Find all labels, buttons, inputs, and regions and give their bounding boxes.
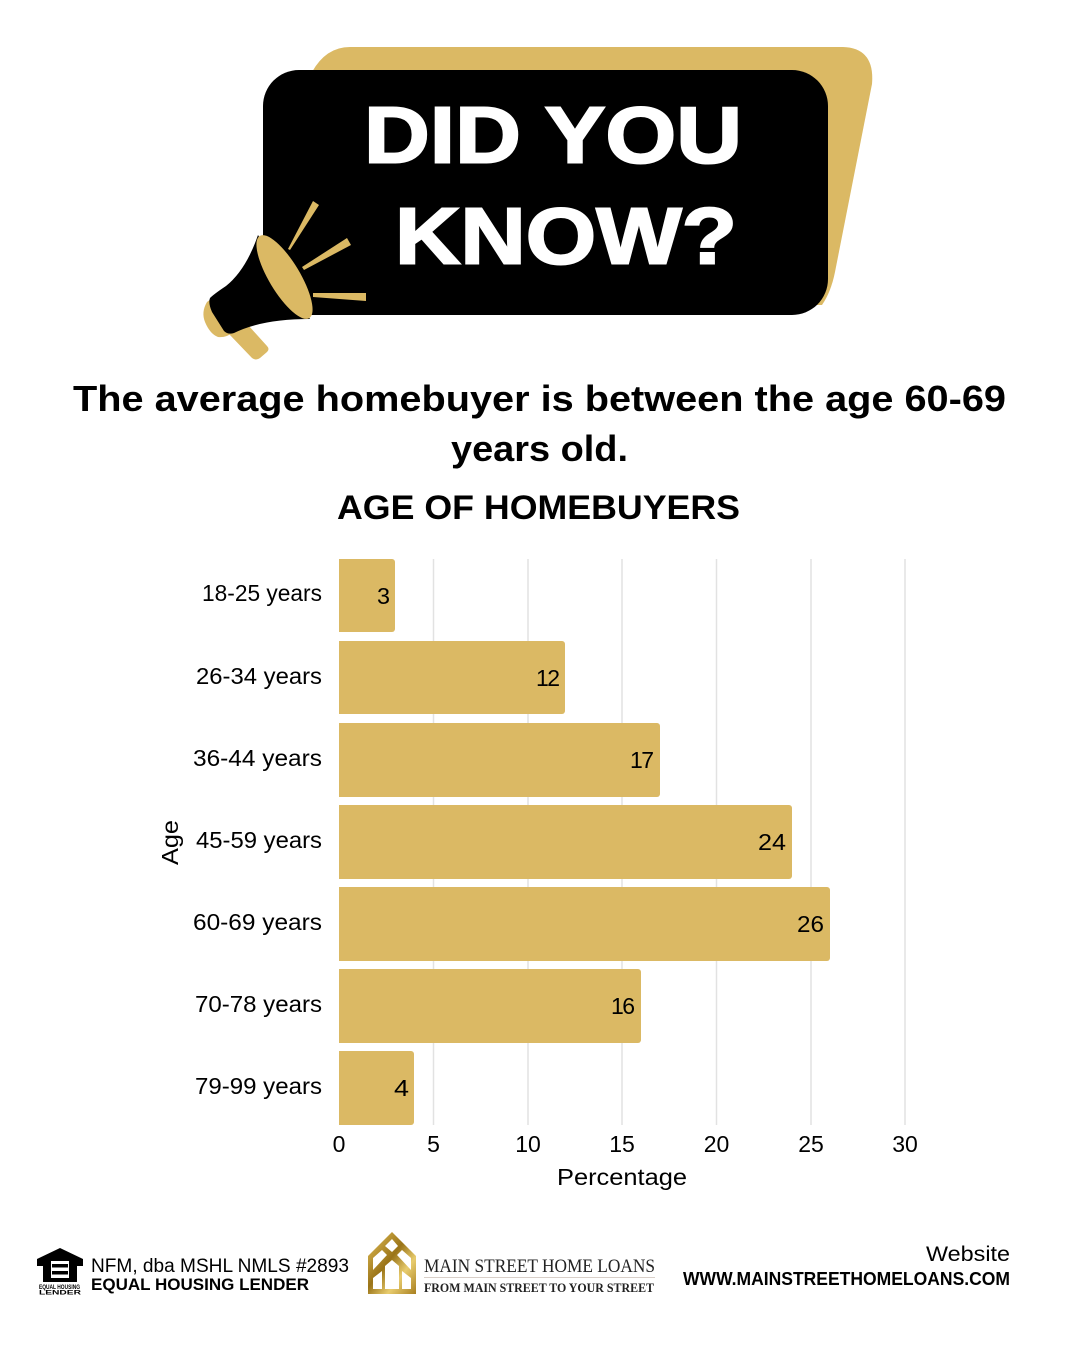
equal housing lender text: EQUAL HOUSING LENDER (91, 1275, 309, 1294)
footer: equal housing lender (37, 1248, 349, 1296)
axis tick labels: 10 (515, 1131, 541, 1157)
bar value labels: 17 (630, 747, 654, 773)
age category labels: 45-59 years (196, 827, 322, 853)
age category labels: 60-69 years (193, 909, 322, 935)
bar value labels: 16 (611, 993, 635, 1019)
banner black panel (263, 70, 828, 315)
footer: website: Website (926, 1243, 1010, 1266)
heading: did you know (364, 90, 742, 280)
age category labels (193, 580, 322, 1099)
banner gold backing shape (312, 47, 872, 305)
bar value labels: 26 (797, 911, 824, 937)
bar value labels (377, 583, 824, 1101)
bar value labels: 4 (394, 1075, 409, 1101)
footer: website: WWW.MAINSTREETHOMELOANS.COM (683, 1269, 1010, 1289)
tagline: FROM MAIN STREET TO YOUR STREET (424, 1281, 655, 1295)
license text: NFM, dba MSHL NMLS #2893 (91, 1256, 349, 1277)
icon: megaphone (203, 201, 366, 360)
icon: equal housing (37, 1248, 83, 1296)
bars (339, 559, 830, 1125)
headline statement: The average homebuyer is between the age 60-69 (73, 378, 1006, 419)
bar chart: age of homebuyers (157, 559, 918, 1190)
axis tick labels: 30 (892, 1131, 918, 1157)
axis tick labels: 5 (427, 1131, 440, 1157)
x axis title: Percentage (557, 1164, 687, 1190)
company name: MAIN STREET HOME LOANS (424, 1256, 655, 1277)
bar value labels: 24 (758, 829, 786, 855)
axis tick labels (333, 1131, 918, 1157)
heading: did you know: DID YOU (364, 90, 742, 180)
age category labels: 26-34 years (196, 663, 322, 689)
banner: did you know (263, 47, 872, 315)
bar value labels: 12 (536, 665, 560, 691)
headline statement: years old. (451, 428, 628, 469)
y axis title: Age (157, 820, 183, 865)
axis tick labels: 0 (333, 1131, 345, 1157)
icon: gold house (368, 1232, 416, 1294)
icon: equal housing: EQUAL HOUSING (39, 1285, 80, 1291)
age category labels: 79-99 years (195, 1073, 322, 1099)
icon: equal housing: LENDER (39, 1290, 81, 1296)
bar value labels: 3 (377, 583, 390, 609)
chart title: AGE OF HOMEBUYERS (337, 489, 740, 527)
heading: did you know: KNOW? (395, 192, 737, 280)
axis tick labels: 20 (704, 1131, 729, 1157)
footer: website (683, 1243, 1010, 1289)
footer: main street home loans logo (368, 1232, 655, 1295)
age category labels: 36-44 years (193, 745, 322, 771)
age category labels: 18-25 years (202, 580, 322, 606)
axis tick labels: 25 (798, 1131, 824, 1157)
headline statement (73, 378, 1006, 469)
axis tick labels: 15 (609, 1131, 635, 1157)
age category labels: 70-78 years (195, 991, 322, 1017)
